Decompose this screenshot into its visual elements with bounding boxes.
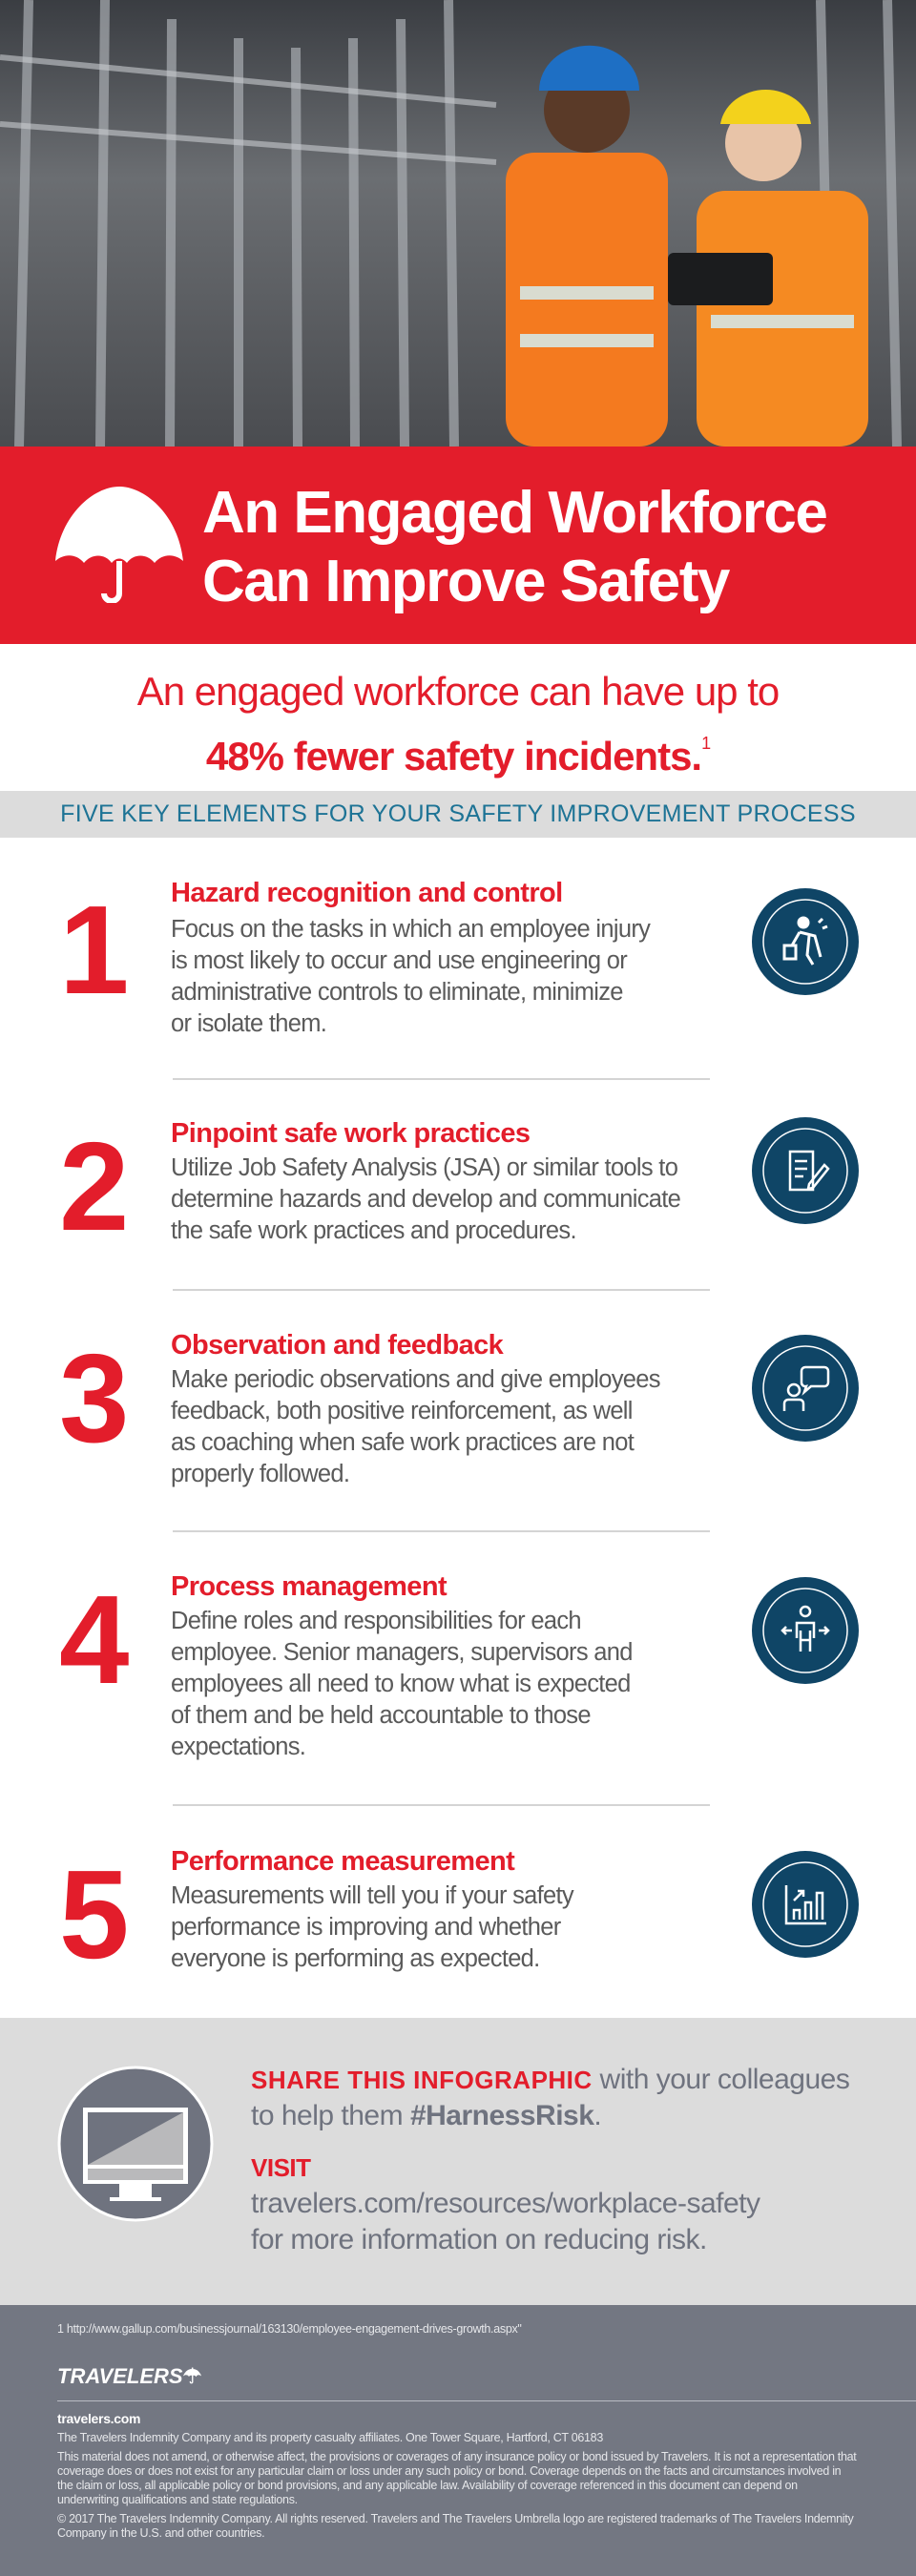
body 4: employees all need to know what is expected <box>171 1671 631 1697</box>
title text: Can Improve Safety <box>202 549 729 614</box>
subtitle stat: 48% fewer safety incidents.1 <box>206 734 710 779</box>
legal text: This material does not amend, or otherwise affect, the provisions or coverages of any insurance policy or bond issued by Travelers. It is not a representation that coverage does or does not exist for any particular claim or loss under any such policy or bond. Coverage depends on the facts and circumstances involved in the claim or loss, all applicable policy or bond provisions, and any applicable law. Availability of coverage referenced in this document can depend on underwriting qualifications and state regulations. <box>57 2450 856 2506</box>
heading 4: Process management <box>171 1571 447 1602</box>
share text: travelers.com/resources/workplace-safety <box>251 2188 760 2219</box>
item 3 <box>59 1328 859 1487</box>
body 5 <box>171 1882 574 1972</box>
worker 2 <box>668 90 868 447</box>
body 3 <box>171 1366 660 1487</box>
icon: lifting worker <box>752 888 859 995</box>
number 1: 1 <box>59 880 125 1020</box>
body 5: everyone is performing as expected. <box>171 1945 540 1972</box>
logo: travelers: TRAVELERS☂ <box>57 2364 201 2388</box>
number 2: 2 <box>59 1116 125 1257</box>
item 5 <box>59 1844 859 1984</box>
hero photo <box>0 0 916 447</box>
subtitle stat: An engaged workforce can have up to <box>137 669 779 714</box>
icon: umbrella <box>55 487 183 603</box>
share text <box>251 2064 849 2255</box>
item 1 <box>59 878 859 1037</box>
footnote: 1 http://www.gallup.com/businessjournal/163130/employee-engagement-drives-growth.aspx" <box>57 2322 522 2336</box>
title text <box>202 480 826 614</box>
icon: person arrows <box>752 1577 859 1684</box>
body 1: administrative controls to eliminate, minimize <box>171 979 623 1006</box>
body 5: Measurements will tell you if your safety <box>171 1882 573 1909</box>
legal text: © 2017 The Travelers Indemnity Company. All rights reserved. Travelers and The Travelers Umbrella logo are registered trademarks of The Travelers Indemnity Company in the U.S. and other countries. <box>57 2512 853 2540</box>
item 4 <box>59 1569 859 1760</box>
body 3: Make periodic observations and give employees <box>171 1366 660 1393</box>
heading 5: Performance measurement <box>171 1846 514 1877</box>
title text: An Engaged Workforce <box>202 480 826 546</box>
heading 3: Observation and feedback <box>171 1330 503 1361</box>
section header: FIVE KEY ELEMENTS FOR YOUR SAFETY IMPROVEMENT PROCESS <box>60 800 856 827</box>
body 1: is most likely to occur and use engineering or <box>171 947 627 974</box>
icon: monitor <box>57 2067 214 2221</box>
share text: to help them #HarnessRisk. <box>251 2100 601 2131</box>
number 4: 4 <box>59 1569 125 1710</box>
worker 1 <box>506 46 668 447</box>
icon: person speech bubble <box>752 1335 859 1442</box>
body 4: Define roles and responsibilities for each <box>171 1608 581 1634</box>
footer <box>0 2305 916 2576</box>
body 4: employee. Senior managers, supervisors and <box>171 1639 633 1666</box>
number 5: 5 <box>59 1844 125 1984</box>
body 3: as coaching when safe work practices are not <box>171 1429 634 1456</box>
body 3: feedback, both positive reinforcement, as well <box>171 1398 633 1424</box>
body 2: Utilize Job Safety Analysis (JSA) or similar tools to <box>171 1154 677 1181</box>
title banner <box>0 447 916 644</box>
icon: document pen <box>752 1117 859 1224</box>
number 3: 3 <box>59 1328 125 1468</box>
legal text: travelers.com <box>57 2411 140 2426</box>
item 2 <box>59 1116 859 1257</box>
body 1: or isolate them. <box>171 1010 326 1037</box>
body 4 <box>171 1608 633 1760</box>
share panel <box>0 2018 916 2305</box>
body 2: the safe work practices and procedures. <box>171 1217 576 1244</box>
share text: for more information on reducing risk. <box>251 2224 707 2255</box>
subtitle stat <box>137 669 779 779</box>
legal text: The Travelers Indemnity Company and its property casualty affiliates. One Tower Square, Hartford, CT 06183 <box>57 2431 603 2444</box>
legal text <box>57 2411 857 2540</box>
body 5: performance is improving and whether <box>171 1914 561 1941</box>
icon: bar chart <box>752 1851 859 1958</box>
share text: VISIT <box>251 2153 311 2182</box>
body 1 <box>171 916 651 1037</box>
body 4: of them and be held accountable to those <box>171 1702 591 1729</box>
body 3: properly followed. <box>171 1461 349 1487</box>
body 1: Focus on the tasks in which an employee injury <box>171 916 650 943</box>
heading 2: Pinpoint safe work practices <box>171 1118 530 1149</box>
section header <box>0 791 916 838</box>
heading 1: Hazard recognition and control <box>171 878 563 908</box>
share text: SHARE THIS INFOGRAPHIC with your colleagues <box>251 2064 849 2095</box>
body 4: expectations. <box>171 1734 305 1760</box>
body 2: determine hazards and develop and communicate <box>171 1186 680 1213</box>
body 2 <box>171 1154 680 1244</box>
